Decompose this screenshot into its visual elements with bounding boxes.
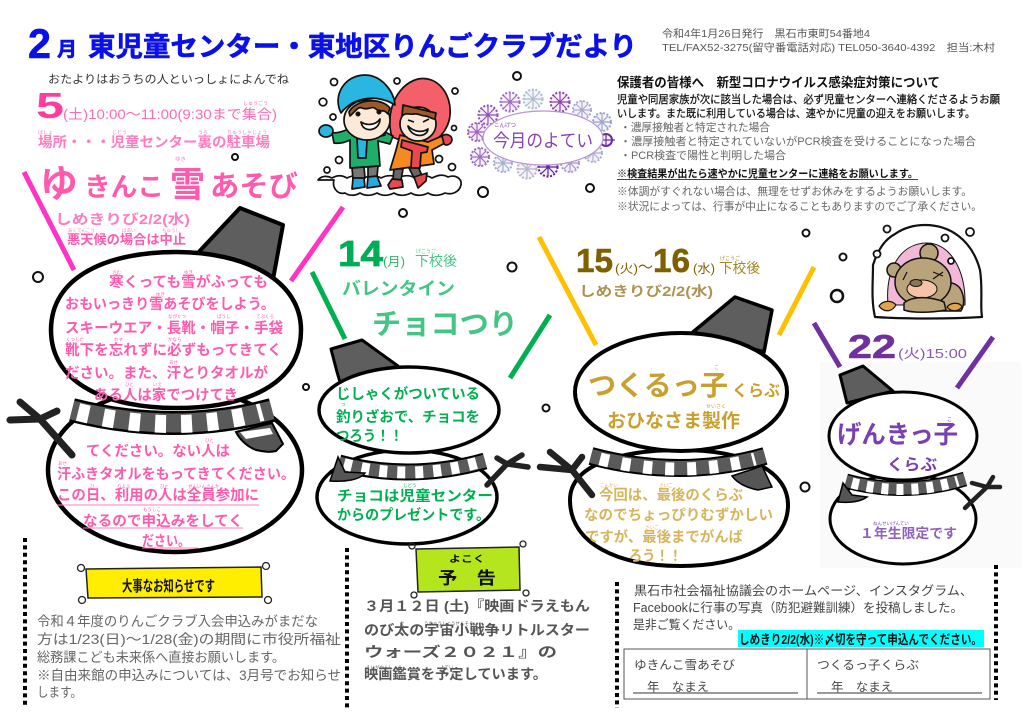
event: 5th snowman body text: 寒くっても雪がふっても (109, 273, 268, 291)
event: 15-16th header: (水) (693, 262, 715, 276)
event: 5th snowman body text: ひと (160, 484, 169, 489)
read-together note: おたよりはおうちの人といっしょによんでね (48, 73, 290, 86)
event: 14th header: げこうご (416, 248, 436, 255)
schedule label (493, 121, 593, 151)
event: 5th snowman body text: あせ (169, 360, 178, 366)
application form: 年 なまえ (647, 680, 709, 694)
event: 5th snowman body text: もうしこ (143, 507, 161, 513)
decorative rays (24, 172, 993, 388)
event: 5th snowman body text: ださい。また、汗とりタオルが (65, 364, 268, 382)
event: 5th snow play header: ちゅうし (162, 228, 180, 234)
event: 5th snow play header: (土)10:00～11:00(9:30まで集合) (63, 107, 277, 122)
application form (624, 649, 990, 699)
event: 22nd snowman text: ねんせいげんてい (873, 520, 909, 527)
text: movie preview: ウォーズ２０２１』の (364, 644, 557, 660)
title: 東児童センター・東地区りんごクラブだより (88, 31, 637, 62)
event: 14th header: バレンタイン (342, 279, 455, 299)
event: 5th snowman body text: いえ (153, 382, 162, 388)
event: 5th snow play header: うら (198, 130, 208, 136)
snowman 3 (540, 297, 788, 566)
event: 14th snowman text: 釣りざおで、チョコを (336, 408, 480, 426)
event: 15-16th header: 下校後 (719, 260, 760, 276)
event: 15-16th snowman text: 今回は、最後のくらぶ (599, 486, 743, 504)
event: 5th snowman body text: ひと (205, 438, 214, 443)
icon: sleeping bear (872, 225, 982, 318)
event: 15-16th header: しめきりび2/2(水) (579, 284, 713, 299)
panel background: 22nd snowman (820, 362, 1021, 568)
event: 22nd snowman text: くらぶ (887, 456, 937, 474)
event: 5th snowman body text: てください。ない人は (86, 443, 230, 460)
event: 5th snowman body text: てぶくろ (256, 314, 274, 320)
event: 14th header: 下校後 (415, 253, 457, 269)
text: movie preview: えいがかんしょう (366, 664, 402, 671)
guardian notice: ・濃厚接触者と特定されていないがPCR検査を受けることになった場合 (620, 134, 976, 148)
guardian notice: ・PCR検査で陽性と判明した場合 (620, 148, 786, 162)
event: 14th header (338, 233, 518, 341)
event: 14th snowman text: じしゃくがついている (336, 385, 480, 403)
event: 15-16th header: (火) (615, 262, 638, 276)
event: 5th snowman body text: なるので申込みをしてく (83, 513, 243, 530)
issue info (662, 27, 996, 54)
event: 5th snow play header: ゆ (40, 164, 78, 206)
icon: children in snow (318, 75, 461, 195)
event: 22nd header: (火)15:00 (898, 346, 967, 361)
event: 15-16th snowman text: ろう！！ (629, 548, 682, 565)
event: 5th snow play header: 5 (36, 85, 64, 126)
event: 5th snow play header: ちゅうしゃじょう (227, 130, 267, 136)
event: 5th snowman body text: ながぐつ (168, 313, 186, 320)
guardian notice: 児童や同居家族が次に該当した場合は、必ず児童センターへ連絡くださるようお願 (617, 92, 1000, 106)
text: website notice: 是非ご覧ください。 (633, 617, 740, 632)
schedule label: 今月のよてい (493, 131, 593, 151)
event: 15-16th snowman text: こ (714, 365, 719, 371)
event: 5th snowman body text: ださい。 (142, 533, 190, 550)
guardian notice: ※状況によっては、行事が中止になることもありますのでご了承ください。 (617, 199, 982, 213)
text: club application: 令和４年度のりんごクラブ入会申込みがまだな (37, 613, 318, 629)
event: 15-16th header: 15 (576, 242, 613, 279)
event: 22nd snowman text (837, 417, 958, 541)
event: 22nd snowman text: こ (947, 417, 952, 423)
dotted column dividers (25, 538, 996, 710)
text: club application: します。 (37, 685, 82, 700)
text: club application: ※自由来館の申込みについては、3月号でお知らせ (37, 667, 341, 683)
application form: つくるっ子くらぶ (817, 658, 919, 672)
event: 5th snow play header: ばあい (122, 227, 136, 234)
event: 14th snowman text: からのプレゼントです。 (337, 506, 490, 524)
event: 5th snow play header: あそび (210, 170, 298, 203)
guardian notice: ※体調がすぐれない場合は、無理をせずお休みをするようお願いします。 (617, 184, 972, 198)
text: movie preview: うちゅうしょうせんそう (424, 620, 474, 627)
banner: important notice (78, 562, 272, 604)
event: 5th snowman body text: ぼうし (217, 313, 231, 320)
text: club application: 総務課こども未来係へ直接お願いします。 (37, 650, 285, 665)
event: 5th snowman body text: 靴下を忘れずに必ずもってきてく (65, 341, 282, 359)
event: 5th snowman body text: ゆき (184, 270, 193, 276)
event: 5th snowman body text: ゆき (156, 292, 165, 298)
event: 5th snow play header: 悪天候の場合は中止 (67, 232, 186, 247)
guardian notice: 保護者の皆様へ 新型コロナウイルス感染症対策について (617, 75, 940, 90)
event: 14th snowman text: つろう！！ (336, 428, 403, 445)
event: 5th snowman body text: おもいっきり雪あそびをしよう。 (65, 296, 275, 313)
title (28, 20, 637, 67)
event: 5th snow play header (36, 85, 298, 247)
event: 14th snowman text: つ (341, 402, 346, 407)
event: 5th snow play header: じどう (112, 129, 127, 136)
event: 15-16th snowman text: くらぶ (732, 382, 780, 400)
event: 14th header: 14 (338, 233, 383, 274)
event: 5th snow play header: あくてんこう (68, 228, 95, 234)
event: 15-16th snowman text: せいさく (706, 403, 726, 410)
event: 5th snowman body text: 汗ふきタオルをもってきてください。 (57, 466, 295, 483)
event: 5th snowman body text: くつした (66, 337, 84, 343)
application form: ゆきんこ雪あそび (634, 658, 735, 672)
event: 15-16th header: ～ (638, 259, 653, 276)
event: 15-16th snowman text: なのでちょっぴりむずかしい (584, 507, 773, 524)
text: movie preview: 映画鑑賞を予定しています。 (364, 666, 547, 682)
banner: preview (409, 541, 529, 598)
event: 5th snowman body text: さむ (112, 269, 121, 275)
snowman 1 (10, 208, 302, 552)
snowman 4 (829, 366, 1000, 564)
event: 5th snowman body text: ある人は家でつけてき (94, 387, 238, 404)
event: 5th snowman body text: この日、利用の人は全員参加に (57, 486, 259, 504)
event: 5th snowman body text: あせ (58, 461, 67, 467)
snow dots (33, 72, 846, 492)
guardian notice: ※検査結果が出たら速やかに児童センターに連絡をお願いします。 (617, 167, 918, 180)
event: 5th snow play header: ゆき (175, 156, 186, 163)
event: 15-16th snowman text: おひなさま製作 (607, 410, 740, 432)
text: website notice (633, 583, 973, 632)
text: movie preview: た (400, 621, 405, 627)
event: 15-16th snowman text: ですが、最後までがんば (585, 528, 743, 546)
event: 15-16th snowman text: つくるっ子 (588, 370, 728, 401)
title: 月 (57, 39, 77, 61)
event: 5th snow play header: しめきりび2/2(水) (55, 212, 190, 227)
event: 5th snow play header: しゅうごう (243, 100, 268, 107)
event: 5th snow play header: ばしょ (38, 129, 53, 136)
event: 5th snowman body text: スキーウエア・長靴・帽子・手袋 (65, 319, 283, 337)
icon: snowflake lace frame (468, 90, 615, 178)
event: 15-16th header: げこうご (720, 255, 740, 262)
event: 5th snowman body text: ひ (90, 484, 95, 489)
title: 2 (28, 20, 51, 67)
event: 15-16th snowman text: さいご (659, 482, 673, 488)
text: website notice: Facebookに行事の写真（防犯避難訓練）を投稿しました。 (633, 600, 963, 615)
issue info: 令和4年1月26日発行 黒石市東町54番地4 (662, 27, 870, 40)
event: 22nd snowman text: １年生限定です (860, 525, 957, 541)
text: movie preview (364, 598, 590, 682)
event: 15-16th snowman text: さいご (645, 524, 659, 530)
event: 14th header: チョコつり (372, 309, 518, 341)
event: 5th snowman body text: わす (114, 336, 123, 343)
schedule label: こんげつ (494, 121, 516, 129)
guardian notice: いします。また既に利用している場合は、速やかに児童の迎えをお願いします。 (617, 107, 975, 120)
banner: important notice: 大事なお知らせです (122, 577, 215, 595)
event: 22nd header: 22 (848, 328, 896, 365)
text: club application (37, 613, 342, 700)
event: 5th snowman body text: ひと (125, 382, 134, 387)
banner: preview: よこく (449, 554, 485, 564)
event: 5th snow play header: きんこ (84, 172, 164, 202)
event: 15-16th snowman text: こんかい (600, 482, 618, 489)
event: 15-16th header (576, 242, 760, 299)
text: movie preview: ３月１２日 (土)『映画ドラえもん (364, 598, 590, 614)
text: movie preview: よてい (440, 665, 454, 670)
event: 15-16th header: 16 (653, 242, 690, 279)
event: 5th snowman body text: ぜんいんさんか (188, 483, 220, 490)
issue info: TEL/FAX52-3275(留守番電話対応) TEL050-3640-4392 担当:木村 (662, 41, 996, 54)
event: 5th snowman body text (57, 269, 295, 550)
event: 5th snowman body text: かなら (168, 336, 182, 343)
guardian notice: ・濃厚接触者と特定された場合 (620, 120, 770, 134)
event: 14th snowman text (336, 385, 493, 524)
guardian notice (617, 75, 1000, 213)
event: 14th snowman text: じどう (403, 482, 416, 489)
snowman 2 (317, 340, 528, 544)
text: club application: 方は1/23(日)～1/28(金)の期間に市役所福祉 (37, 632, 342, 647)
text: website notice: 黒石市社会福祉協議会のホームページ、インスタグラム、 (634, 583, 973, 598)
event: 5th snowman body text: りよう (117, 484, 130, 490)
banner: preview: 予 告 (438, 569, 496, 588)
event: 15-16th snowman text (584, 365, 780, 565)
application form: 年 なまえ (831, 680, 893, 694)
event: 22nd header (848, 328, 967, 365)
event: 14th header: (月) (383, 255, 405, 269)
event: 5th snow play header: 雪 (170, 166, 205, 205)
event: 14th snowman text: チョコは児童センター (337, 488, 493, 505)
event: 5th snow play header: 場所・・・児童センター裏の駐車場 (38, 134, 270, 150)
event: 22nd snowman text: げんきっ子 (837, 421, 958, 449)
text: movie preview: のび太の宇宙小戦争リトルスター (364, 622, 590, 638)
